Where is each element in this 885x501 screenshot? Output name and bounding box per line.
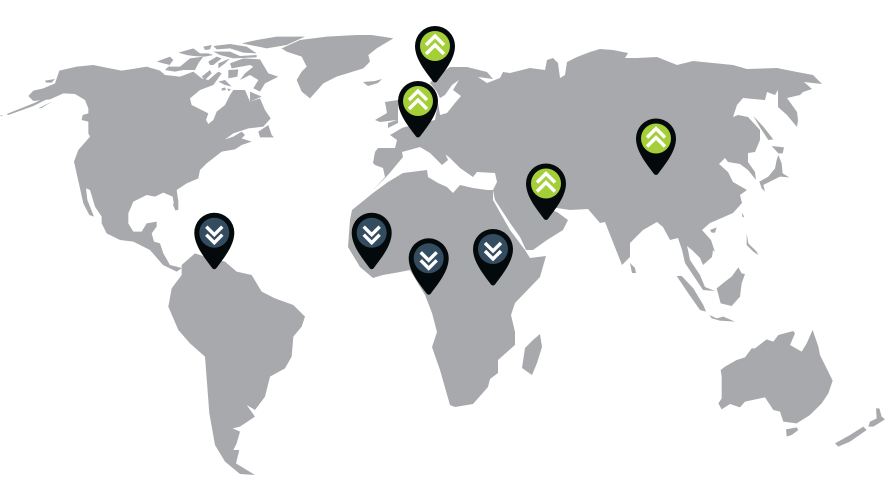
landmass: Indonesia	[677, 267, 745, 322]
landmass: Madagascar	[522, 334, 542, 375]
landmass: Ireland and Britain	[375, 100, 398, 128]
pin: blue down arrow, East Africa	[473, 229, 513, 286]
landmass: Iceland	[363, 79, 382, 86]
landmass: East Asian islands	[710, 116, 789, 255]
landmass: Greenland and Ellesmere	[242, 35, 393, 98]
pin: blue down arrow, Venezuela	[194, 213, 234, 269]
pin: blue down arrow, West Africa	[352, 213, 392, 269]
landmass: Eurasia	[373, 49, 822, 291]
landmass: Australia	[718, 330, 833, 437]
landmass: New Zealand	[835, 408, 885, 447]
landmass: South America	[168, 253, 305, 475]
pin: green up arrow, Middle East	[526, 164, 566, 220]
landmass: Caribbean island	[173, 200, 178, 211]
landmass: Canadian Arctic islands	[157, 44, 278, 102]
pin: green up arrow, Western Europe	[398, 81, 438, 138]
pin: green up arrow, Scandinavia	[415, 26, 455, 82]
landmass: North America	[0, 65, 274, 272]
landmass: Sri Lanka	[630, 263, 636, 273]
pin: green up arrow, China	[636, 118, 676, 175]
pin: blue down arrow, Central Africa	[409, 238, 449, 295]
landmass: Africa	[348, 170, 546, 407]
